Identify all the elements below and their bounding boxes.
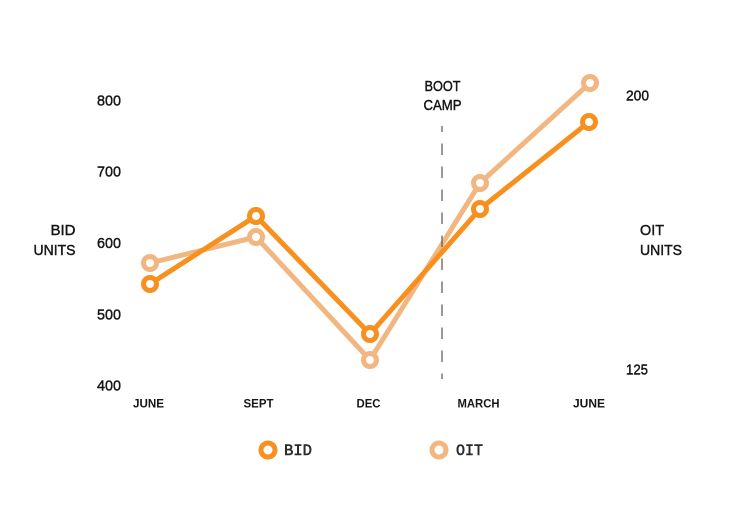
- legend: OIT: OIT: [456, 442, 483, 460]
- right axis values: [626, 88, 649, 379]
- legend: BID: BID: [284, 442, 312, 460]
- month labels: JUNE: [133, 397, 164, 411]
- left axis values: 700: [97, 164, 121, 181]
- BID series: [144, 116, 596, 340]
- left axis values: 600: [97, 235, 121, 252]
- legend: BID: [261, 442, 312, 460]
- left axis values: 800: [97, 93, 121, 110]
- month labels: [133, 397, 605, 411]
- right axis title: UNITS: [640, 242, 682, 259]
- left axis title: UNITS: [34, 242, 76, 259]
- legend: OIT: [432, 442, 483, 460]
- boot camp dashed marker: [441, 126, 443, 379]
- left axis values: [97, 93, 121, 395]
- boot camp label: [424, 78, 462, 114]
- right axis title: OIT: [640, 222, 664, 239]
- month labels: MARCH: [458, 397, 500, 411]
- month labels: JUNE: [573, 397, 605, 411]
- month labels: DEC: [356, 397, 381, 411]
- left axis title: [34, 222, 76, 259]
- month labels: SEPT: [244, 397, 274, 411]
- right axis values: 125: [626, 362, 648, 379]
- OIT series: [144, 76, 596, 366]
- right axis values: 200: [626, 88, 649, 105]
- left axis values: 400: [97, 378, 121, 395]
- left axis values: 500: [97, 306, 121, 323]
- boot camp label: BOOT: [424, 78, 460, 95]
- right axis title: [640, 222, 682, 259]
- left axis title: BID: [50, 222, 76, 239]
- boot camp label: CAMP: [424, 97, 462, 114]
